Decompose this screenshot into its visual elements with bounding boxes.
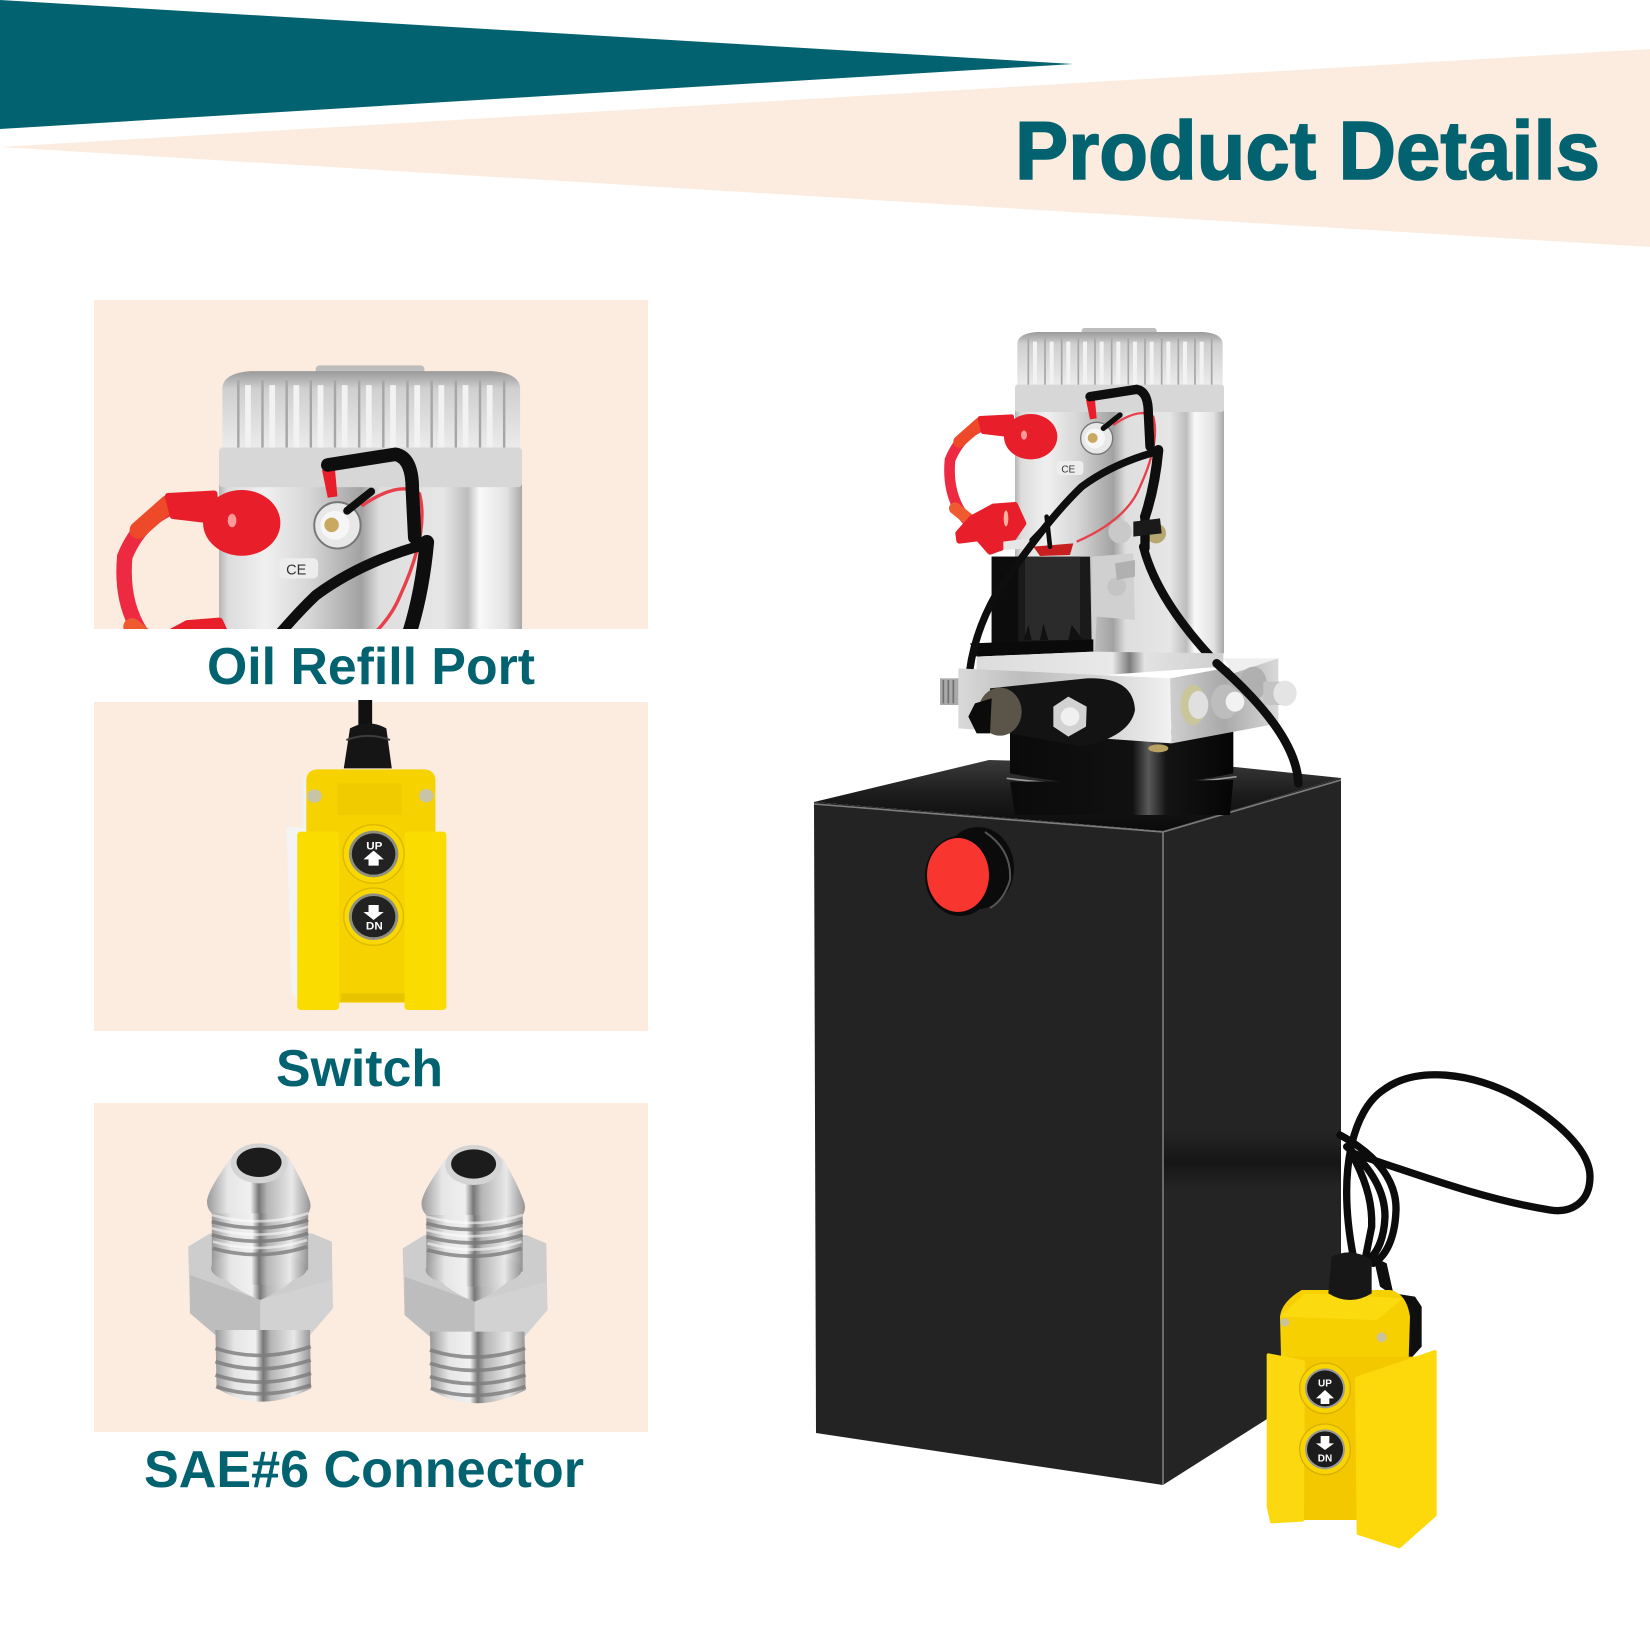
CE mark: CE (1061, 464, 1076, 475)
clamp and bolts (1107, 520, 1166, 596)
image: motor close-up (116, 365, 522, 629)
solenoid coil (968, 678, 1168, 752)
up button (1300, 1363, 1350, 1414)
panel: switch (94, 700, 648, 1031)
header banner: teal wedge (0, 0, 1073, 129)
down button (1300, 1424, 1350, 1475)
yellow housing (1280, 1290, 1420, 1520)
right-side valve fittings (1181, 667, 1297, 725)
black base cylinder (1010, 730, 1233, 785)
valve manifold block (940, 652, 1278, 743)
label: SAE#6 Connector: SAE#6 Connector (144, 1441, 584, 1499)
label: Switch: Switch (276, 1040, 443, 1098)
thin red wire (1077, 413, 1155, 542)
header banner: cream wedge (0, 49, 1650, 247)
up button: UP (1318, 1379, 1332, 1390)
red battery boot and wire (950, 414, 1057, 552)
CE mark (1057, 461, 1083, 475)
red spade connector (1086, 400, 1097, 419)
panel: SAE#6 connector (94, 1103, 648, 1432)
product: cable and pendant switch (1268, 1075, 1590, 1547)
bracket plate behind solenoid (1092, 553, 1135, 650)
down button: DN (1318, 1454, 1332, 1465)
coiled cable (1340, 1075, 1590, 1263)
panel: oil refill port (94, 300, 648, 629)
label: Oil Refill Port: Oil Refill Port (207, 638, 535, 696)
cable gland (1328, 1252, 1372, 1300)
image: yellow switch pendant: DN (366, 921, 383, 932)
yellow holder (1268, 1352, 1435, 1547)
title: Product Details (1015, 104, 1600, 197)
cooling fins (1017, 328, 1223, 387)
image: yellow switch pendant: UP (366, 841, 383, 852)
motor body (1015, 410, 1224, 653)
terminal post (1081, 422, 1113, 454)
collar (1015, 385, 1224, 412)
red filler cap (925, 827, 1014, 916)
solenoid (970, 538, 1093, 657)
image: pair of steel connectors (188, 1143, 547, 1403)
black harness wires (968, 389, 1217, 710)
product: motor and pump assembly (940, 328, 1298, 815)
long harness over manifold (1217, 663, 1298, 783)
black clip (1373, 1257, 1422, 1367)
product: hydraulic tank (814, 760, 1341, 1485)
image: yellow switch pendant (286, 700, 446, 1010)
